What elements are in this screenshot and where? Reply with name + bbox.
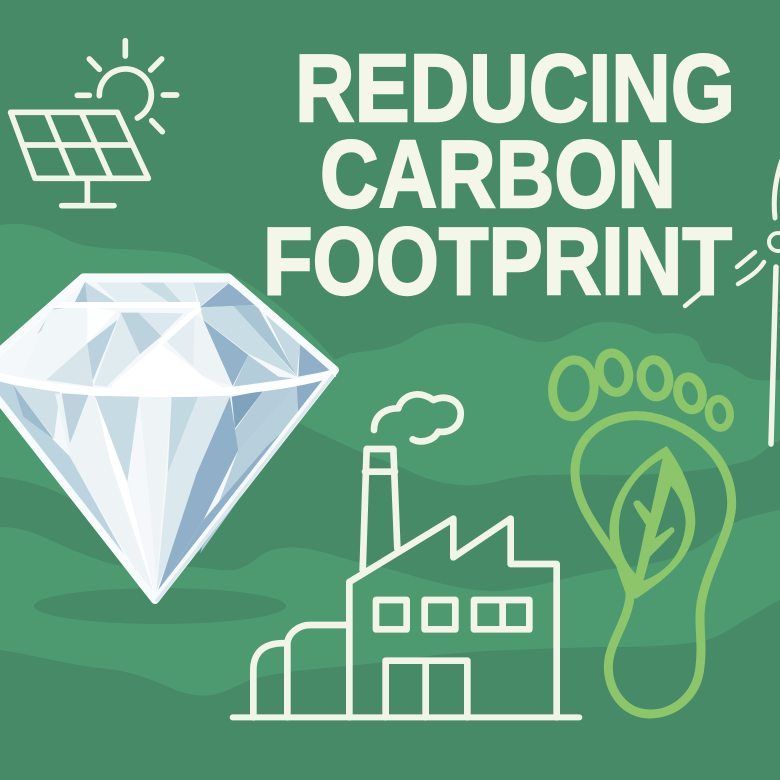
pavilion facets bbox=[0, 377, 328, 595]
diamond ground shadow bbox=[34, 588, 286, 624]
chimney bbox=[363, 449, 397, 570]
foot outline bbox=[575, 416, 732, 714]
title: CARBON bbox=[320, 121, 676, 228]
toes bbox=[550, 350, 732, 429]
leaf bbox=[609, 446, 695, 598]
side annex bbox=[253, 625, 349, 717]
door bbox=[386, 661, 467, 717]
ground line bbox=[233, 708, 579, 726]
icon: factory bbox=[233, 394, 579, 717]
title bbox=[263, 35, 735, 315]
diamond silhouette bbox=[0, 277, 335, 600]
white girdle band and table line bbox=[0, 373, 335, 393]
icon: wind turbine bbox=[685, 160, 780, 444]
icon: diamond bbox=[0, 277, 335, 602]
crown facets bbox=[23, 282, 330, 387]
main building bbox=[349, 519, 557, 717]
icon: solar panel and sun bbox=[11, 41, 177, 206]
smoke cloud bbox=[374, 394, 461, 441]
icon: footprint with leaf bbox=[550, 350, 732, 714]
windows bbox=[376, 600, 529, 629]
solar panel bbox=[11, 112, 148, 206]
outer edge line bbox=[0, 277, 335, 600]
sun bbox=[77, 41, 177, 132]
